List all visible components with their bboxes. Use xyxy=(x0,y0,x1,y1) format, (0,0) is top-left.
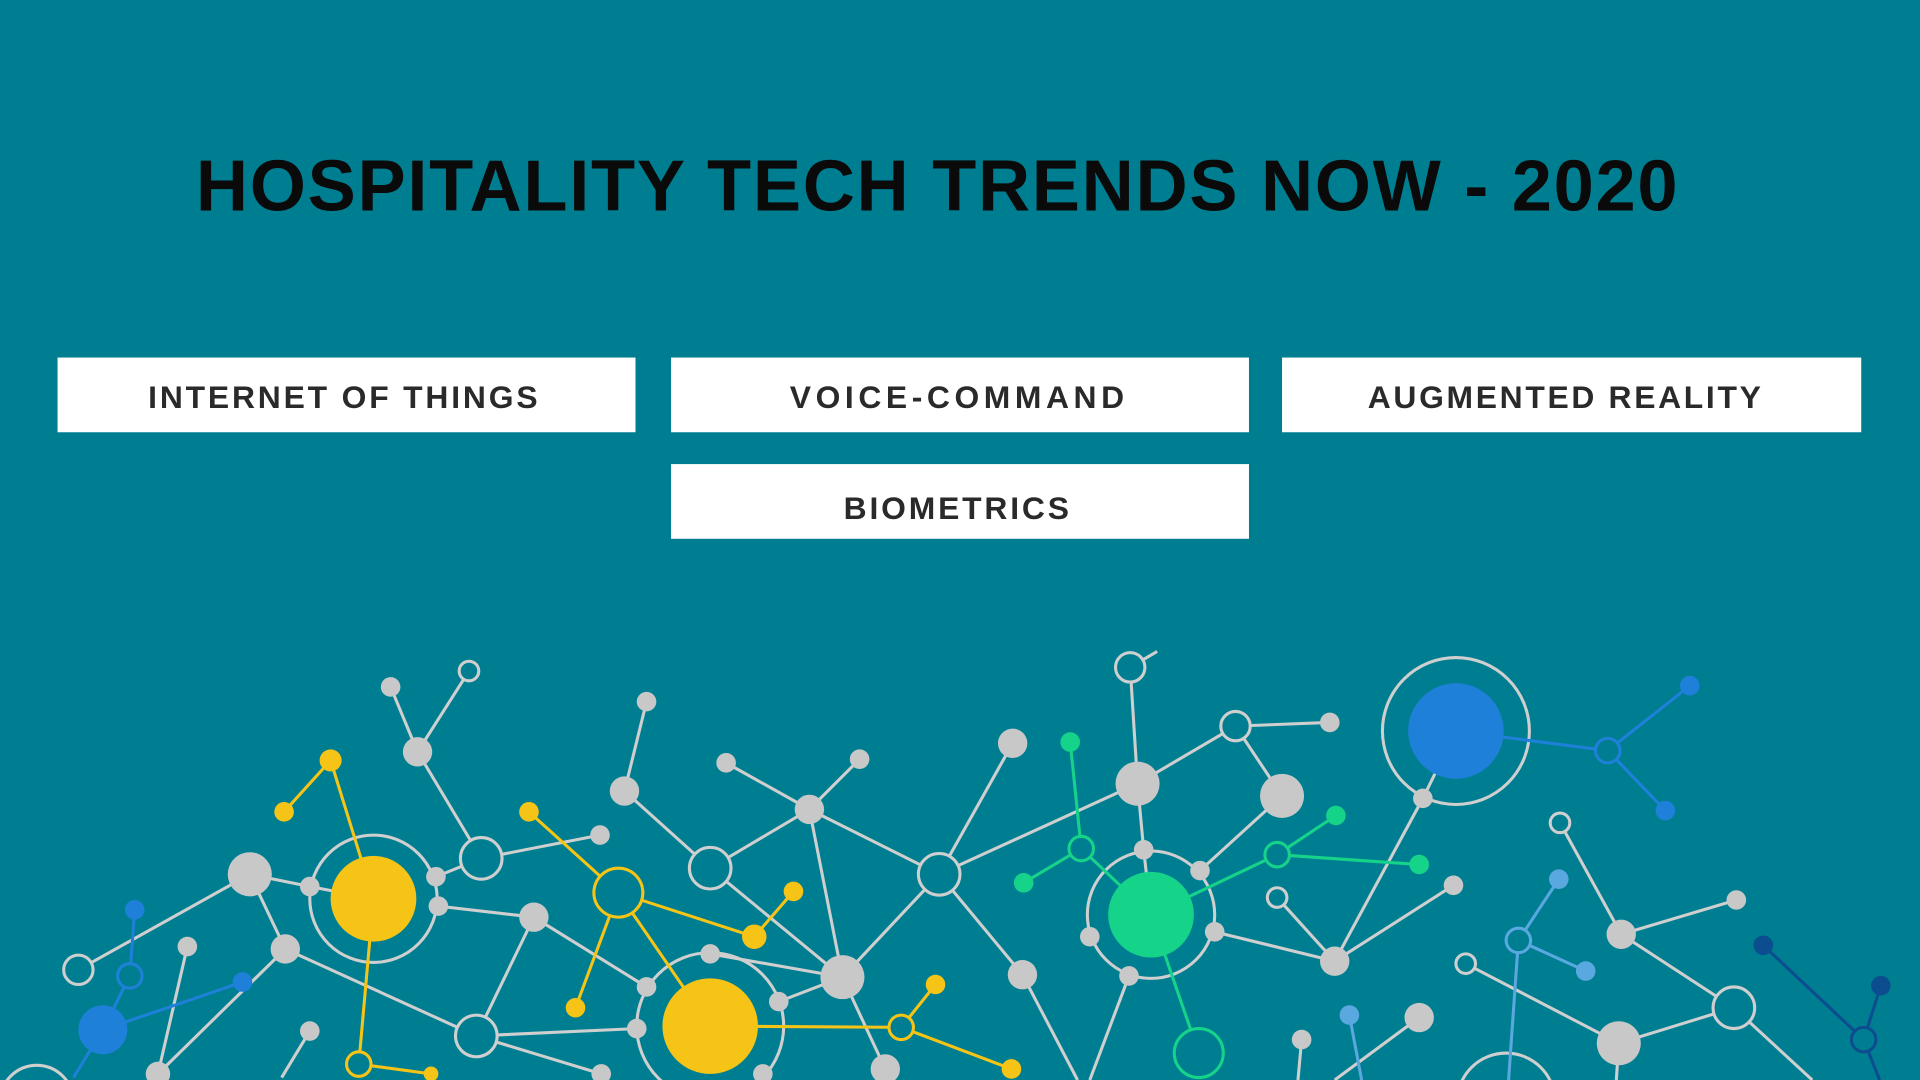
box: internet of things xyxy=(58,358,636,432)
network graphic xyxy=(0,651,1891,1080)
box: biometrics: BIOMETRICS xyxy=(844,490,1069,526)
box: biometrics xyxy=(671,464,1249,539)
box: internet of things: INTERNET OF THINGS xyxy=(148,379,538,415)
box: augmented reality xyxy=(1282,358,1861,432)
box: voice-command xyxy=(671,358,1249,432)
box: voice-command: VOICE-COMMAND xyxy=(790,379,1124,415)
title: HOSPITALITY TECH TRENDS NOW - 2020 xyxy=(196,147,1678,227)
box: augmented reality: AUGMENTED REALITY xyxy=(1368,379,1761,415)
